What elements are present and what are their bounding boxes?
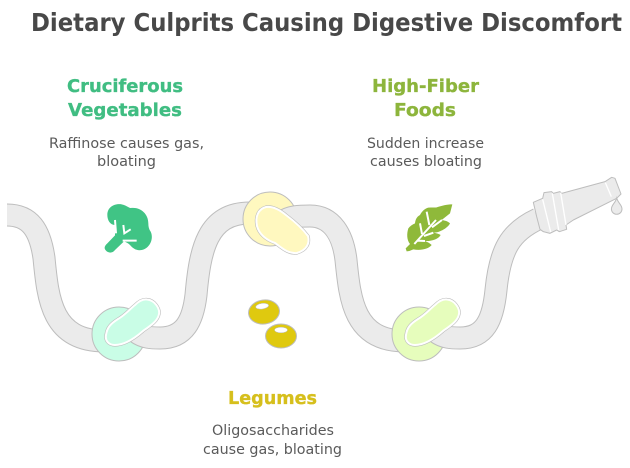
text: cruciferous description: bloating xyxy=(97,154,156,170)
digestive tube: segment to nozzle xyxy=(436,219,538,338)
text: high-fiber description xyxy=(367,136,484,170)
label: legumes: Legumes xyxy=(228,388,317,409)
water drop xyxy=(611,198,622,214)
digestive tube: start segment xyxy=(7,215,105,341)
knot circle: high-fiber xyxy=(392,307,446,361)
nozzle xyxy=(533,177,621,233)
label: high-fiber foods: Foods xyxy=(394,100,456,121)
label: cruciferous vegetables xyxy=(67,76,183,121)
icon: legumes xyxy=(247,298,296,348)
sausage: high-fiber knot xyxy=(406,299,459,345)
digestive tube: segment to third knot xyxy=(282,216,405,341)
label: cruciferous vegetables: Vegetables xyxy=(68,100,182,121)
label: high-fiber foods: High-Fiber xyxy=(372,76,479,97)
text: cruciferous description xyxy=(49,136,204,170)
knot circle: cruciferous xyxy=(92,307,146,361)
knot circle: legumes xyxy=(243,192,297,246)
label: cruciferous vegetables: Cruciferous xyxy=(67,76,183,97)
text: high-fiber description: causes bloating xyxy=(370,154,482,170)
text: high-fiber description: Sudden increase xyxy=(367,136,484,152)
icon: wheat xyxy=(406,204,452,251)
sausage: cruciferous knot xyxy=(106,299,159,345)
label: high-fiber foods xyxy=(372,76,479,121)
icon: broccoli xyxy=(105,204,152,253)
text: legumes description: Oligosaccharides xyxy=(212,423,334,439)
text: cruciferous description: Raffinose causes gas, xyxy=(49,136,204,152)
digestive tube: segment to second knot xyxy=(136,213,250,338)
text: legumes description xyxy=(203,423,342,458)
text: legumes description: cause gas, bloating xyxy=(203,442,342,458)
sausage: legumes knot xyxy=(256,207,309,253)
